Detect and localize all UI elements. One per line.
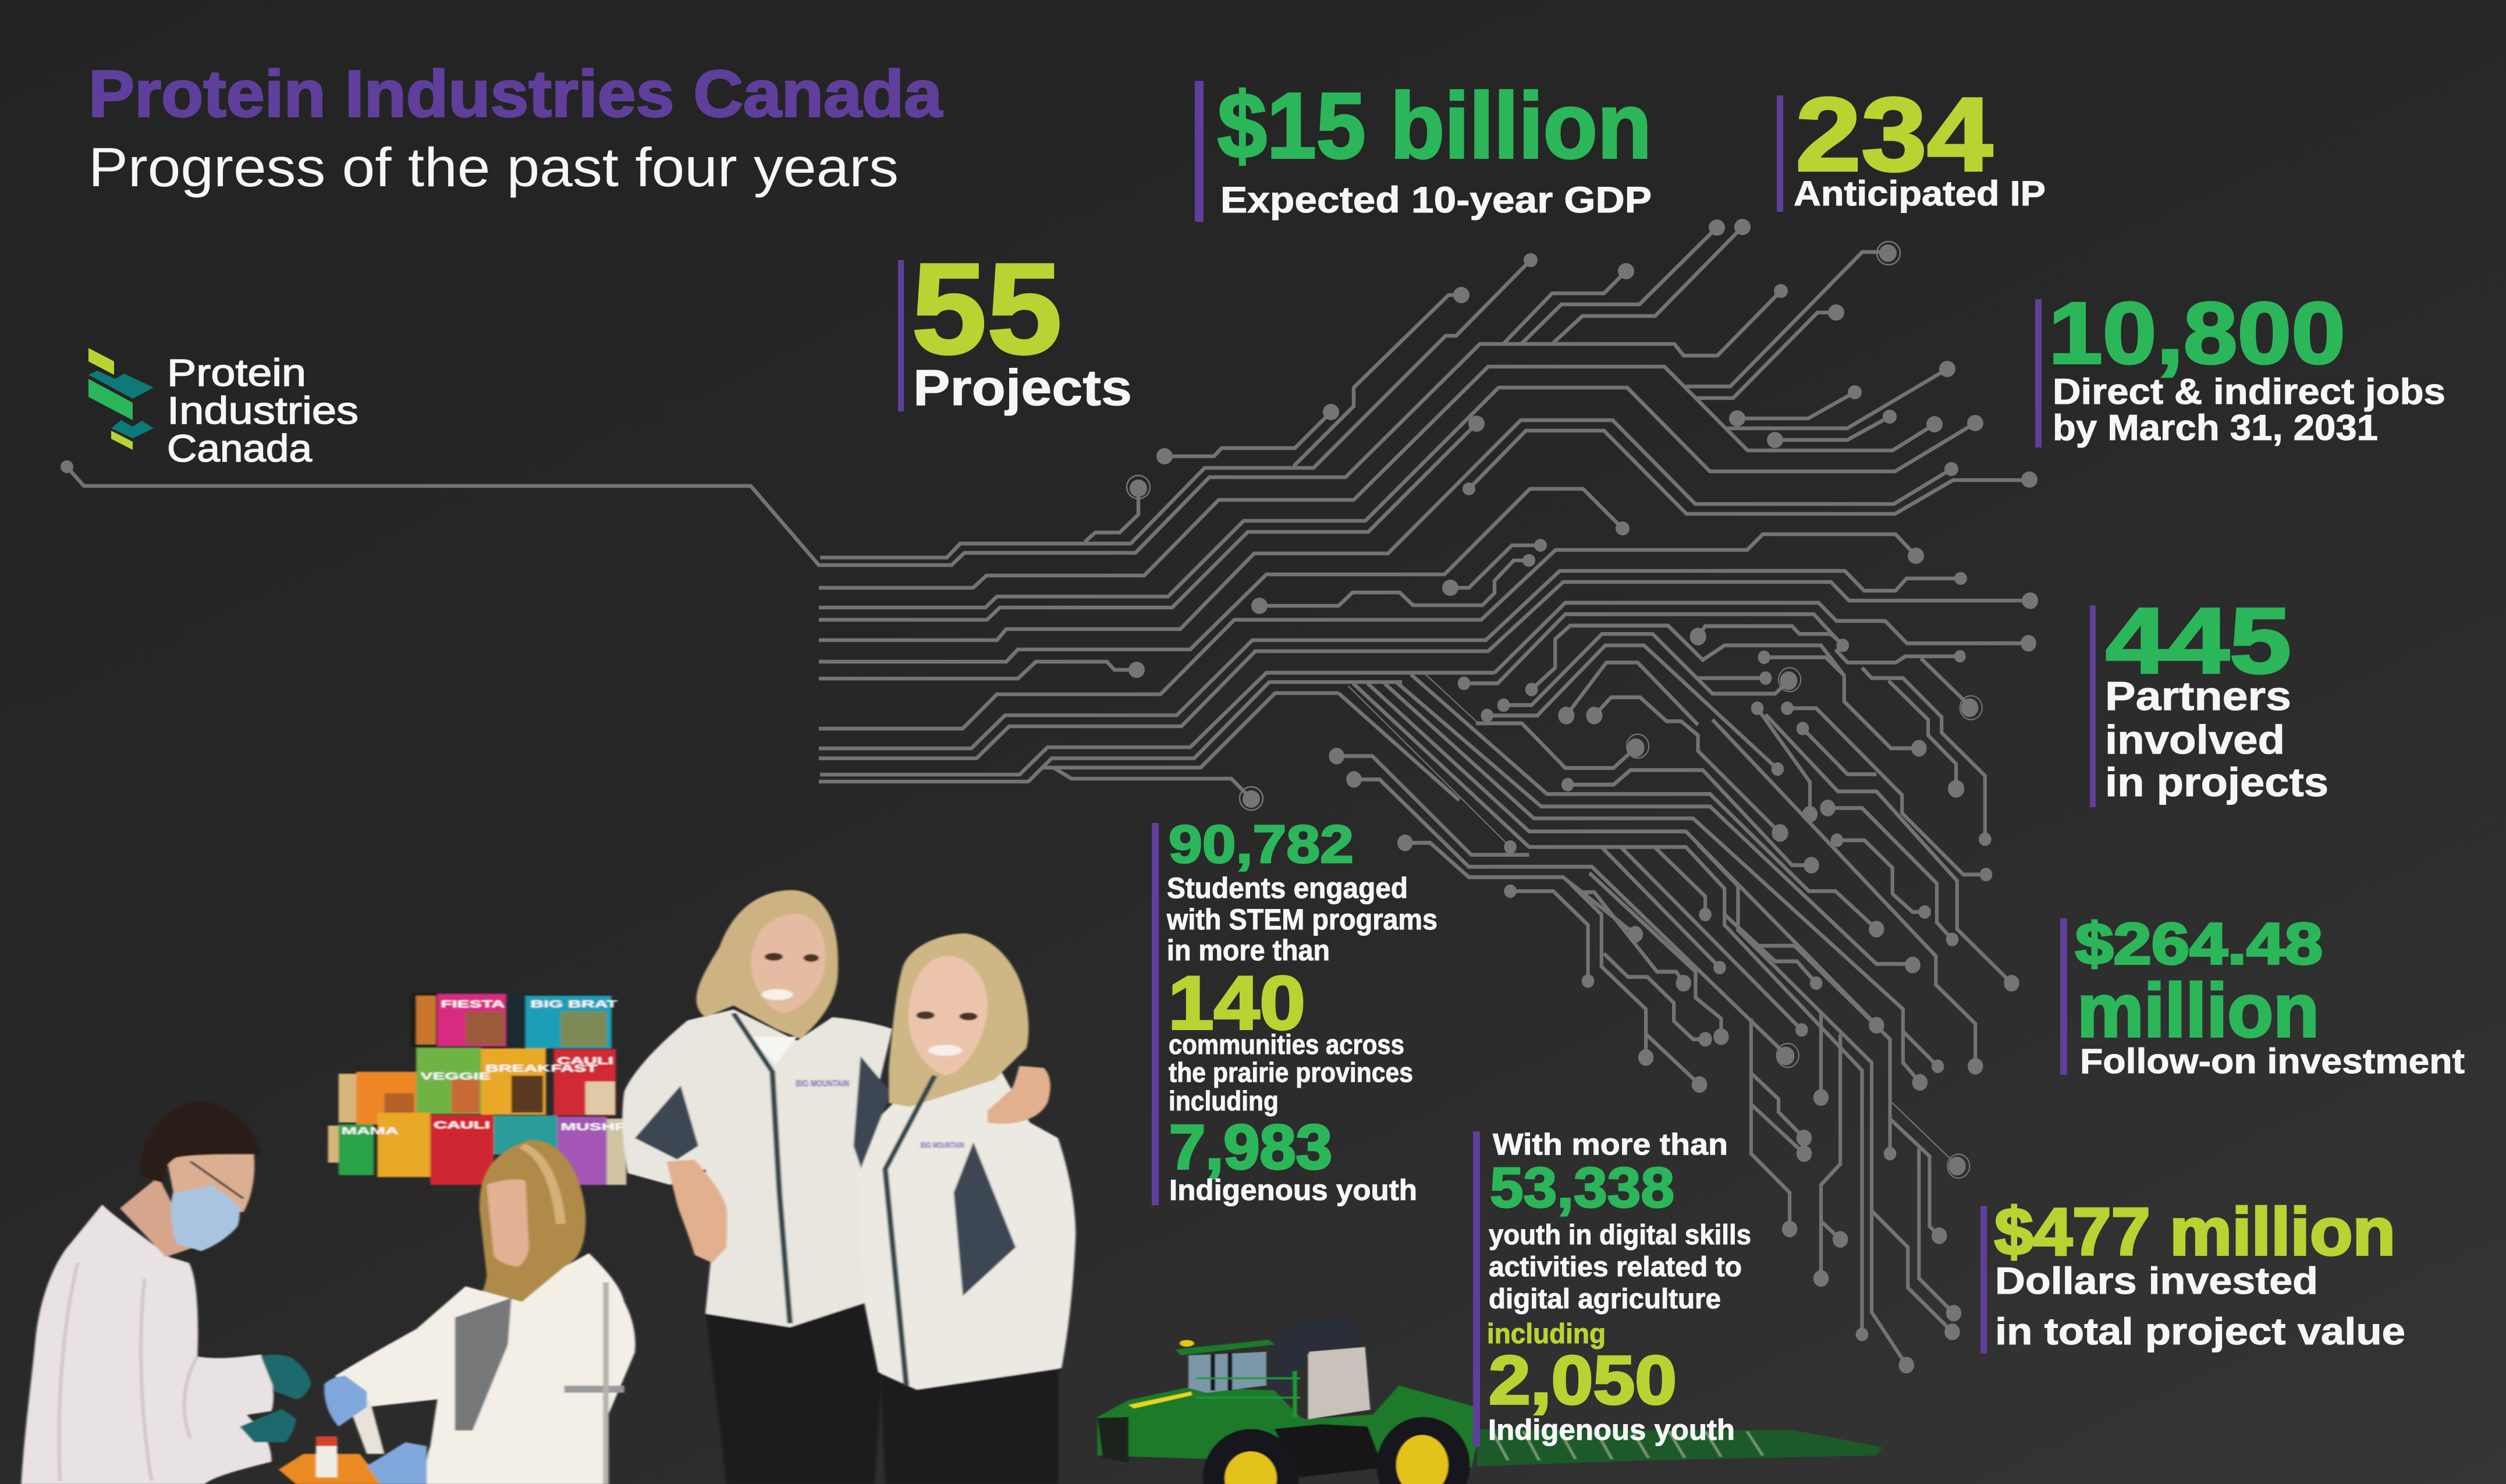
stat: students engaged, communities and Indigenous youth: 90,782 [1169, 815, 1354, 874]
stat: 234: Anticipated IP [1794, 174, 2046, 213]
logo: Protein Industries Canada: Protein [167, 351, 306, 394]
stat: students engaged, communities and Indigenous youth: 7,983 [1169, 1112, 1332, 1182]
stat: digital skills youth and Indigenous youth: activities related to [1489, 1252, 1742, 1283]
photo: packaged plant-based food products: VEGGIE [420, 1071, 491, 1082]
stat: 10,800: 10,800 [2049, 284, 2345, 382]
photo: packaged plant-based food products: MAMA [342, 1126, 399, 1137]
stat: 55 projects [898, 237, 1132, 416]
stat: 234 [1777, 76, 2046, 213]
stat: digital skills youth and Indigenous youth: 53,338 [1490, 1156, 1674, 1219]
photo: packaged plant-based food products: FIESTA [441, 999, 505, 1010]
stat: students engaged, communities and Indigenous youth: Indigenous youth [1169, 1174, 1417, 1206]
logo: Protein Industries Canada: Industries [167, 389, 358, 432]
stat: students engaged, communities and Indigenous youth: Students engaged [1167, 872, 1408, 904]
stat: 10,800 [2035, 284, 2445, 448]
photo: woman in lab coat with sample rack [279, 1140, 636, 1484]
photo: packaged plant-based food products: BIG BRAT [530, 999, 618, 1010]
stat: $264.48 million [2060, 911, 2465, 1081]
photo: green field sprayer tractor [1098, 1318, 1882, 1484]
stat: 445: involved [2105, 717, 2285, 762]
subtitle: Progress of the past four years [88, 137, 899, 198]
stat: $15 billion: Expected 10-year GDP [1220, 180, 1652, 221]
stat: $477 million: Dollars invested [1995, 1259, 2318, 1302]
photo: packaged plant-based food products: CAULI [434, 1120, 490, 1131]
stat: students engaged, communities and Indigenous youth: the prairie provinces [1169, 1057, 1413, 1088]
stat: students engaged, communities and Indigenous youth: 140 [1168, 960, 1305, 1045]
stat: 445: in projects [2105, 759, 2328, 805]
photo: packaged plant-based food products [328, 993, 672, 1185]
stat: $264.48 million: $264.48 [2075, 911, 2323, 977]
photo: man in lab coat [21, 1102, 311, 1484]
logo: Protein Industries Canada [88, 348, 358, 470]
photo: woman in white jacket, left [622, 890, 892, 1484]
stat: $15 billion [1195, 73, 1652, 222]
photo: packaged plant-based food products: BREAKFAST [485, 1063, 598, 1074]
stat: digital skills youth and Indigenous youth: 2,050 [1489, 1342, 1677, 1419]
stat: digital skills youth and Indigenous youth: digital agriculture [1489, 1284, 1721, 1315]
stat: students engaged, communities and Indigenous youth [1152, 815, 1437, 1206]
stat: 445 [2090, 588, 2328, 807]
photo: packaged plant-based food products: CAULI [557, 1055, 613, 1066]
stat: $477 million [1980, 1195, 2405, 1354]
stat: 10,800: Direct & indirect jobs [2053, 372, 2445, 412]
stat: students engaged, communities and Indigenous youth: in more than [1167, 934, 1330, 967]
photo: woman in white jacket, left: BIG MOUNTAIN [796, 1078, 849, 1089]
photo: woman in white jacket, right: BIG MOUNTAIN [921, 1140, 964, 1150]
stat: digital skills youth and Indigenous youth: With more than [1493, 1128, 1728, 1162]
stat: digital skills youth and Indigenous youth: Indigenous youth [1488, 1414, 1735, 1446]
stat: $477 million: $477 million [1994, 1195, 2395, 1269]
title: Protein Industries Canada [88, 57, 943, 130]
stat: 445: Partners [2105, 673, 2291, 719]
stat: students engaged, communities and Indigenous youth: with STEM programs [1166, 903, 1437, 936]
stat: $477 million: in total project value [1995, 1310, 2405, 1352]
circuit board graphic [61, 219, 2038, 1373]
stat: 234: 234 [1795, 76, 1993, 193]
logo: Protein Industries Canada: Canada [167, 427, 312, 470]
stat: digital skills youth and Indigenous youth: youth in digital skills [1489, 1220, 1751, 1251]
stat: 10,800: by March 31, 2031 [2053, 408, 2378, 448]
stat: digital skills youth and Indigenous youth: including [1487, 1319, 1606, 1350]
stat: 55 projects: Projects [913, 360, 1132, 416]
stat: $264.48 million: Follow-on investment [2080, 1042, 2465, 1081]
stat: $264.48 million: million [2077, 968, 2319, 1053]
stat: 445: 445 [2106, 588, 2291, 693]
stat: digital skills youth and Indigenous youth [1473, 1128, 1751, 1447]
photo: woman in white jacket, right [857, 933, 1075, 1484]
stat: $15 billion: $15 billion [1217, 73, 1652, 177]
stat: students engaged, communities and Indigenous youth: including [1169, 1085, 1279, 1116]
stat: 55 projects: 55 [911, 237, 1062, 381]
photo: packaged plant-based food products: MUSHROOM [561, 1121, 672, 1132]
stat: students engaged, communities and Indigenous youth: communities across [1169, 1029, 1404, 1060]
